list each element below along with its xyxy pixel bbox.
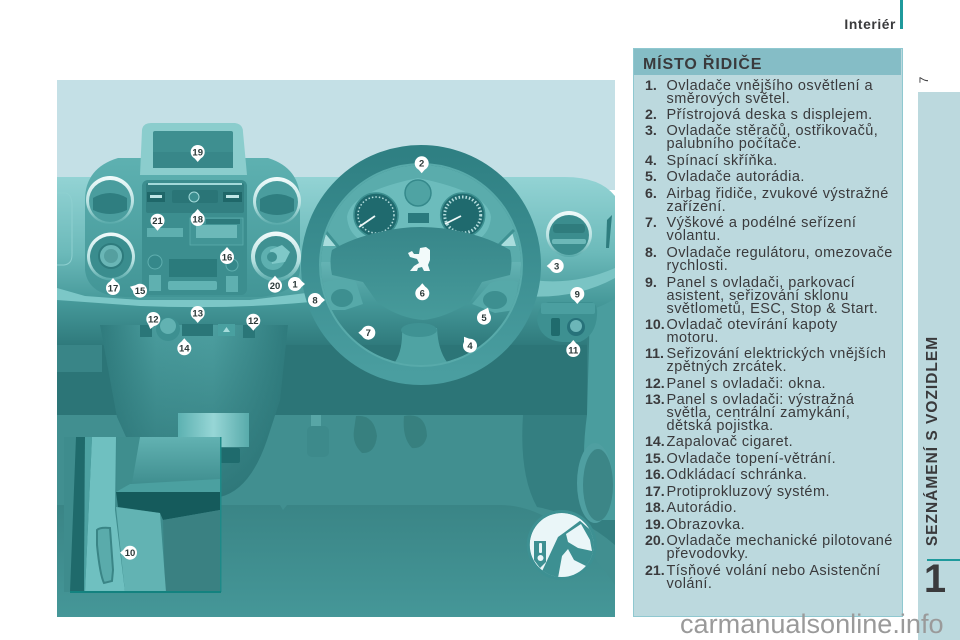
storage compartment bbox=[190, 218, 243, 245]
item 13 bbox=[645, 392, 854, 434]
item 21 bbox=[645, 562, 881, 592]
item 7 bbox=[645, 215, 856, 244]
airbag hub bbox=[330, 227, 512, 320]
door panel speaker bbox=[577, 443, 613, 523]
chapter title: SEZNÁMENÍ S VOZIDLEM bbox=[924, 336, 941, 546]
item 3: 3. bbox=[645, 123, 657, 139]
lower spoke bbox=[395, 323, 447, 368]
item 6: 6. bbox=[645, 186, 657, 202]
chapter divider bbox=[927, 559, 960, 561]
switch row under console bbox=[140, 317, 255, 341]
chapter number: 1 bbox=[924, 557, 946, 601]
item 16: Odkládací schránka. bbox=[666, 467, 807, 483]
right stalk controls bbox=[472, 290, 517, 313]
callout 21: 21 bbox=[152, 216, 163, 227]
item 1 bbox=[645, 78, 873, 106]
item 6 bbox=[645, 186, 889, 214]
item 15: 15. bbox=[645, 450, 665, 466]
item 4: Spínací skříňka. bbox=[666, 152, 778, 168]
item 8: rychlosti. bbox=[666, 258, 728, 274]
item 17: 17. bbox=[645, 484, 665, 500]
callout 16: 16 bbox=[222, 252, 232, 263]
callout 9 bbox=[570, 287, 584, 304]
climate display bbox=[169, 259, 217, 277]
item 3: palubního počítače. bbox=[666, 136, 802, 152]
callout 3: 3 bbox=[554, 261, 559, 272]
climate side knobs bbox=[148, 255, 238, 292]
item 17: Protiprokluzový systém. bbox=[666, 484, 830, 500]
item 8: Ovladače regulátoru, omezovače bbox=[666, 244, 893, 260]
callout 10 bbox=[120, 546, 137, 560]
callout 10: 10 bbox=[125, 548, 135, 559]
callout 12 left: 12 bbox=[148, 314, 159, 325]
column slot bbox=[220, 448, 240, 463]
item 9: Panel s ovladači, parkovací bbox=[666, 274, 855, 290]
item 4: 4. bbox=[645, 152, 657, 168]
callout 20 bbox=[268, 276, 282, 293]
callout 13 bbox=[191, 306, 205, 323]
page heading: Interiér: Interiér bbox=[844, 16, 896, 32]
item 11: Seřizování elektrických vnějších bbox=[666, 346, 886, 362]
item 10: Ovladač otevírání kapoty bbox=[666, 317, 838, 333]
item 13: 13. bbox=[645, 392, 665, 408]
item 16: 16. bbox=[645, 467, 665, 483]
item 9 bbox=[645, 274, 878, 316]
panel: legend list bbox=[633, 48, 903, 617]
dashboard illustration bbox=[57, 80, 615, 617]
watermark: carmanualsonline.info bbox=[680, 608, 944, 639]
center console fascia bbox=[57, 158, 330, 307]
callout 13: 13 bbox=[192, 308, 203, 319]
item 12: 12. bbox=[645, 376, 665, 392]
callout 1: 1 bbox=[292, 279, 298, 290]
callout 5 bbox=[477, 308, 491, 325]
item 13: Panel s ovladači: výstražná bbox=[666, 392, 854, 408]
steering wheel bbox=[311, 155, 531, 375]
item 14: Zapalovač cigaret. bbox=[666, 434, 793, 450]
item 10: 10. bbox=[645, 317, 665, 333]
callout 20: 20 bbox=[270, 281, 280, 292]
item 21: volání. bbox=[666, 576, 712, 592]
left air vent bbox=[86, 176, 134, 224]
wheel rim bbox=[311, 155, 531, 375]
callout 12 right bbox=[246, 314, 260, 331]
callout 2: 2 bbox=[419, 159, 424, 170]
item 20: Ovladače mechanické pilotované bbox=[666, 533, 893, 549]
callout 7 bbox=[358, 326, 375, 340]
item 19: 19. bbox=[645, 516, 665, 532]
item 15: Ovladače topení-větrání. bbox=[666, 450, 836, 466]
light panel below console bbox=[178, 413, 249, 447]
callout 6: 6 bbox=[420, 289, 425, 300]
item 6: Airbag řidiče, zvukové výstražné bbox=[666, 186, 889, 202]
pedals bbox=[311, 415, 427, 453]
page number 7: 7 bbox=[917, 77, 931, 83]
center console lower column bbox=[100, 325, 288, 497]
item 13: světla, centrální zamykání, bbox=[666, 405, 850, 421]
callout 3 bbox=[547, 259, 564, 273]
right air vent bbox=[253, 177, 301, 225]
item 20 bbox=[645, 533, 893, 562]
item 19: Obrazovka. bbox=[666, 516, 745, 532]
glovebox outline left bbox=[57, 204, 72, 266]
item 7: volantu. bbox=[666, 228, 721, 244]
item 13: dětská pojistka. bbox=[666, 418, 774, 434]
callout 19 bbox=[191, 145, 205, 162]
item 9: světlometů, ESC, Stop & Start. bbox=[666, 300, 878, 316]
item 14: 14. bbox=[645, 434, 665, 450]
callout 18: 18 bbox=[192, 214, 203, 225]
under-dash band bbox=[57, 345, 615, 415]
callout 4: 4 bbox=[467, 341, 473, 352]
item 2: Přístrojová deska s displejem. bbox=[666, 106, 873, 122]
header accent bar bbox=[900, 0, 903, 29]
callout 6 bbox=[415, 283, 429, 300]
callout 9: 9 bbox=[575, 289, 580, 300]
item 9: asistent, seřizování sklonu bbox=[666, 288, 849, 304]
instrument cluster bbox=[354, 180, 485, 237]
callout 2 bbox=[415, 156, 429, 173]
switch panel right bbox=[537, 302, 597, 342]
item 12: Panel s ovladači: okna. bbox=[666, 376, 826, 392]
warning icon: airbag passenger bbox=[530, 510, 594, 577]
callout 16 bbox=[220, 247, 234, 264]
item 8: 8. bbox=[645, 244, 657, 260]
item 3: Ovladače stěračů, ostřikovačů, bbox=[666, 123, 878, 139]
emergency call panel bbox=[147, 228, 183, 237]
left rotary control bbox=[87, 232, 135, 280]
callout 4 bbox=[463, 337, 477, 353]
item 11: zpětných zrcátek. bbox=[666, 359, 787, 375]
Peugeot lion emblem bbox=[408, 247, 430, 271]
callout 19: 19 bbox=[192, 147, 203, 158]
door sill and side trim bbox=[522, 298, 615, 545]
item 1: 1. bbox=[645, 78, 657, 94]
callout 11: 11 bbox=[568, 345, 579, 356]
item 9: 9. bbox=[645, 274, 657, 290]
callout 14: 14 bbox=[179, 344, 190, 355]
item 8 bbox=[645, 244, 893, 274]
callout 15 bbox=[130, 284, 147, 298]
item 7: 7. bbox=[645, 215, 657, 231]
right dash band and vent bbox=[536, 211, 615, 297]
callout 7: 7 bbox=[366, 328, 371, 339]
item 6: zařízení. bbox=[666, 198, 726, 214]
callout 8 bbox=[308, 293, 325, 307]
callout 14 bbox=[177, 338, 191, 355]
panel heading background bbox=[634, 49, 901, 75]
item 20: převodovky. bbox=[666, 546, 749, 562]
background: sky area bbox=[57, 80, 615, 190]
display screen housing bbox=[140, 123, 247, 175]
callout 21 bbox=[150, 214, 164, 231]
callout 17: 17 bbox=[108, 283, 118, 294]
panel heading: Místo řidiče: MÍSTO ŘIDIČE bbox=[643, 56, 762, 73]
inset: door pillar bonnet release bbox=[64, 437, 222, 593]
item 21: Tísňové volání nebo Asistenční bbox=[666, 562, 881, 578]
item 7: Výškové a podélné seřízení bbox=[666, 215, 856, 231]
callout 15: 15 bbox=[135, 286, 146, 297]
callout 5: 5 bbox=[481, 313, 487, 324]
item 20: 20. bbox=[645, 533, 665, 549]
callout 1 bbox=[288, 277, 305, 291]
dashboard body bbox=[57, 177, 615, 415]
gear selector rotary control bbox=[251, 232, 301, 282]
callout 18 bbox=[191, 209, 205, 226]
item 1: směrových světel. bbox=[666, 90, 790, 106]
item 18: 18. bbox=[645, 500, 665, 516]
item 2: 2. bbox=[645, 106, 657, 122]
item 5: Ovladače autorádia. bbox=[666, 169, 805, 185]
item 11 bbox=[645, 346, 886, 375]
item 5: 5. bbox=[645, 169, 657, 185]
item 3 bbox=[645, 123, 878, 152]
callout 17 bbox=[106, 278, 120, 295]
left stalk controls bbox=[324, 289, 363, 310]
chapter sidebar bbox=[918, 92, 960, 640]
item 1: Ovladače vnějšího osvětlení a bbox=[666, 78, 873, 94]
item 21: 21. bbox=[645, 562, 665, 578]
item 18: Autorádio. bbox=[666, 500, 737, 516]
callout 11 bbox=[566, 340, 580, 357]
callout 12 right: 12 bbox=[248, 316, 259, 327]
footwell floor bbox=[57, 415, 615, 617]
upper wheel opening bbox=[322, 165, 520, 262]
item 10 bbox=[645, 317, 838, 346]
callout 12 left bbox=[146, 312, 160, 329]
radio unit bbox=[146, 183, 244, 213]
callout 8: 8 bbox=[312, 295, 318, 306]
item 10: motoru. bbox=[666, 330, 719, 346]
climate button row bbox=[168, 281, 217, 290]
item 11: 11. bbox=[645, 346, 664, 362]
